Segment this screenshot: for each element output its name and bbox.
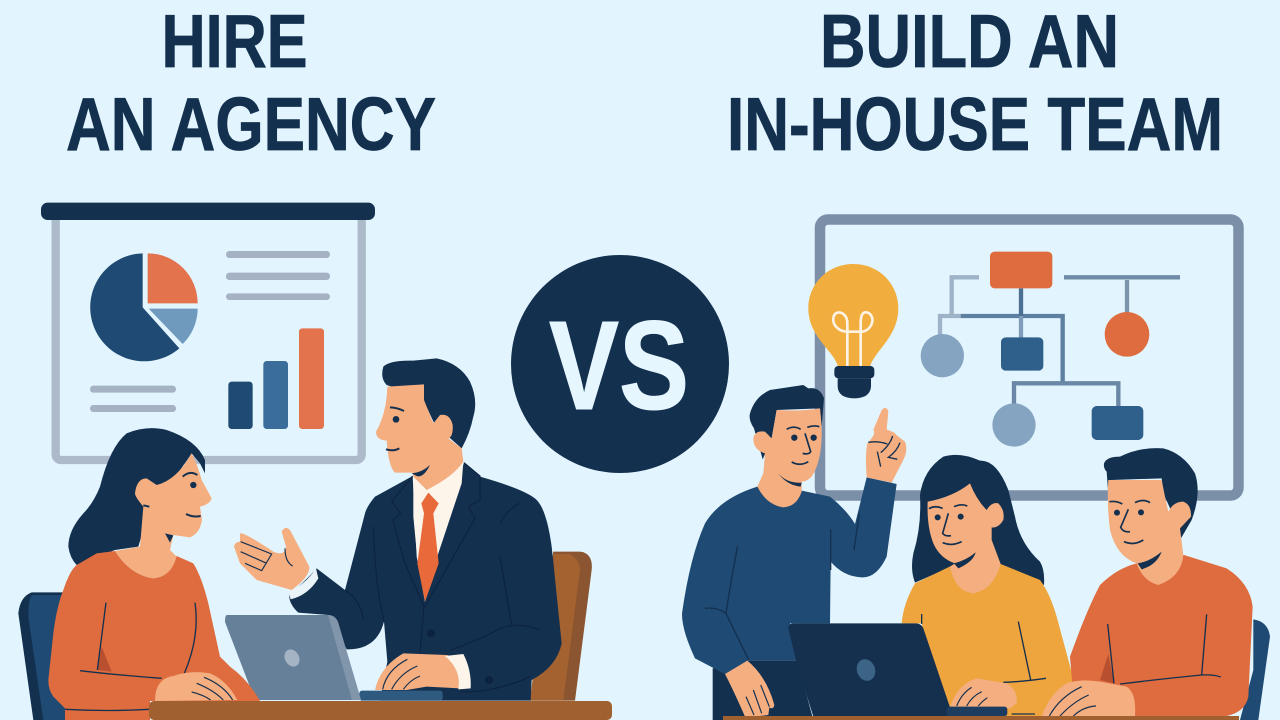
hair <box>750 385 824 459</box>
face <box>376 384 463 490</box>
person: man in orange <box>1042 448 1270 720</box>
pie chart <box>90 253 198 361</box>
cuff <box>288 568 318 599</box>
sweater <box>48 551 260 720</box>
face <box>753 408 822 507</box>
hair <box>68 428 205 565</box>
title: hire an agency: HIRE <box>162 0 308 83</box>
person: woman with agency <box>18 428 260 720</box>
suit <box>289 463 562 701</box>
table: agency <box>149 701 612 720</box>
org chart board: in-house team <box>820 220 1238 496</box>
raised hand <box>866 408 906 483</box>
hair <box>912 455 1044 585</box>
table: team <box>723 716 1239 720</box>
shirt <box>413 462 463 602</box>
sweater <box>1070 555 1253 717</box>
keyboard <box>947 707 1007 716</box>
suit seams <box>345 463 540 692</box>
mouse pad <box>359 691 443 701</box>
laptop: agency <box>225 615 361 700</box>
pants <box>713 661 813 720</box>
vs badge <box>511 255 729 473</box>
lower hand <box>725 661 774 717</box>
icon: light bulb <box>808 264 898 398</box>
laptop: team <box>788 623 1007 717</box>
chair: agency man <box>530 552 592 701</box>
title: build an in-house team <box>727 0 1223 166</box>
vs badge: VS <box>549 295 689 436</box>
tie <box>417 493 439 602</box>
hair <box>1104 448 1198 540</box>
bar chart <box>228 328 324 429</box>
person: agency man in suit <box>288 358 562 701</box>
title: hire an agency <box>66 0 436 166</box>
hand <box>155 672 237 701</box>
hand <box>950 678 1017 708</box>
resting hand <box>375 653 460 690</box>
hand <box>1042 680 1135 716</box>
sweater <box>902 564 1073 717</box>
face <box>115 453 212 578</box>
text lines <box>90 251 330 412</box>
sweater <box>682 477 897 674</box>
title: hire an agency: AN AGENCY <box>66 82 436 166</box>
org chart <box>921 252 1180 447</box>
gesturing hand: agency man <box>234 528 309 590</box>
face <box>928 483 1004 593</box>
title: build an in-house team: BUILD AN <box>820 0 1119 83</box>
person: woman in yellow <box>902 455 1073 717</box>
presentation board: agency <box>41 203 375 460</box>
chair <box>18 592 67 720</box>
face <box>1108 480 1191 585</box>
chair <box>1240 619 1270 720</box>
person: presenter with raised finger <box>682 385 906 720</box>
hair <box>382 358 475 448</box>
